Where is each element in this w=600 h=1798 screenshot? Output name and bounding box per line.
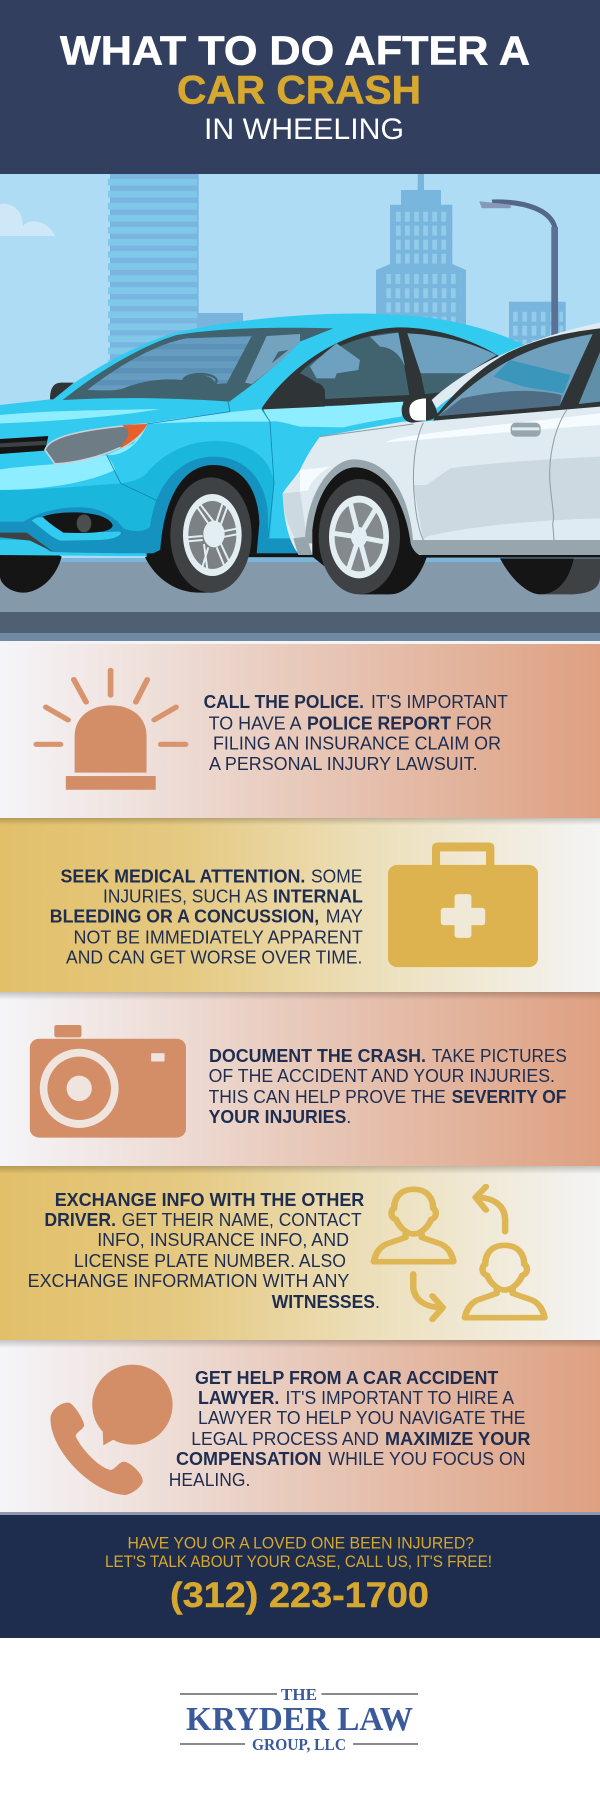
text: get help from a lawyer: WHILE YOU FOCUS ON [328, 1449, 526, 1469]
title line: what to do after a: WHAT TO DO AFTER A [60, 28, 530, 74]
text: get help from a lawyer: GET HELP FROM A CAR ACCIDENT [195, 1368, 498, 1388]
text: exchange info: EXCHANGE INFO WITH THE OTHER [55, 1190, 364, 1210]
panel: get help from a lawyer [0, 1340, 600, 1512]
logo: the kryder law group [180, 1685, 418, 1754]
icon: two people exchanging information [374, 1187, 545, 1319]
illustration: city street with two crashed cars [0, 174, 600, 644]
logo: the kryder law group: KRYDER LAW [186, 1701, 413, 1738]
icon: camera [30, 1025, 186, 1138]
city buildings [108, 174, 566, 364]
text: document the crash: . [346, 1107, 351, 1127]
text: exchange info [28, 1190, 380, 1312]
panel: call to action footer [0, 1512, 600, 1638]
call to action text: HAVE YOU OR A LOVED ONE BEEN INJURED? [128, 1534, 474, 1553]
text: get help from a lawyer: IT'S IMPORTANT TO HIRE A [286, 1388, 514, 1408]
text: document the crash: TAKE PICTURES [432, 1046, 567, 1066]
phone number: (312) 223-1700 [170, 1576, 429, 1615]
text: call the police: IT'S IMPORTANT [371, 692, 508, 712]
text: document the crash: DOCUMENT THE CRASH. [209, 1046, 426, 1066]
panel: call the police [0, 644, 600, 818]
icon: cloud [0, 204, 55, 236]
text: document the crash: SEVERITY OF [452, 1087, 566, 1107]
panel: call to action footer: LET'S TALK ABOUT YOUR CASE, CALL US, IT'S FREE! [105, 1552, 492, 1571]
text: document the crash: THIS CAN HELP PROVE THE [209, 1087, 446, 1107]
text: get help from a lawyer [169, 1368, 530, 1490]
text: get help from a lawyer: HEALING. [169, 1470, 250, 1490]
text: exchange info: . [375, 1292, 380, 1312]
text: document the crash [209, 1046, 567, 1127]
text: call the police: A PERSONAL INJURY LAWSUIT. [209, 754, 478, 774]
text: exchange info: EXCHANGE INFORMATION WITH ANY [28, 1271, 349, 1291]
text: seek medical attention: MAY [326, 906, 363, 926]
text: exchange info: DRIVER. [44, 1210, 116, 1230]
icon: first aid kit [388, 842, 538, 967]
text: exchange info: WITNESSES [272, 1292, 375, 1312]
logo: the kryder law group: GROUP, LLC [252, 1735, 346, 1754]
text: seek medical attention: INTERNAL [273, 886, 363, 906]
text: get help from a lawyer: LAWYER TO HELP YOU NAVIGATE THE [198, 1408, 526, 1428]
text: get help from a lawyer: COMPENSATION [176, 1449, 322, 1469]
text: get help from a lawyer: MAXIMIZE YOUR [385, 1429, 530, 1449]
text: exchange info: INFO, INSURANCE INFO, AND [97, 1230, 349, 1250]
text: call the police: CALL THE POLICE. [204, 692, 364, 712]
text: exchange info: GET THEIR NAME, CONTACT [122, 1210, 362, 1230]
road [0, 558, 600, 644]
text: call the police: FOR [456, 714, 492, 734]
text: call the police: FILING AN INSURANCE CLAIM OR [213, 734, 501, 754]
text: seek medical attention: AND CAN GET WORSE OVER TIME. [66, 948, 362, 968]
text: seek medical attention [50, 866, 363, 968]
text: document the crash: YOUR INJURIES [209, 1107, 346, 1127]
icon: siren [36, 670, 186, 790]
text: seek medical attention: INJURIES, SUCH AS [103, 886, 268, 906]
title line: car crash: CAR CRASH [177, 69, 421, 113]
text: call the police: POLICE REPORT [307, 714, 451, 734]
subtitle: in wheeling: IN WHEELING [204, 113, 404, 146]
text: seek medical attention: BLEEDING OR A CONCUSSION, [50, 906, 319, 926]
panel: title header [0, 0, 600, 174]
street lamp [479, 201, 558, 367]
logo: the kryder law group: THE [281, 1685, 317, 1704]
panel: seek medical attention [0, 818, 600, 992]
text: seek medical attention: SEEK MEDICAL ATTENTION. [60, 866, 305, 886]
blue car [0, 314, 600, 593]
text: document the crash: OF THE ACCIDENT AND YOUR INJURIES. [209, 1066, 555, 1086]
text: call the police: TO HAVE A [209, 714, 302, 734]
panel: exchange info [0, 1166, 600, 1340]
icon: phone with speech bubble [50, 1365, 173, 1495]
text: get help from a lawyer: LEGAL PROCESS AND [191, 1429, 379, 1449]
text: exchange info: LICENSE PLATE NUMBER. ALSO [74, 1251, 346, 1271]
text: seek medical attention: NOT BE IMMEDIATELY APPARENT [74, 928, 363, 948]
white car [283, 323, 600, 594]
text: get help from a lawyer: LAWYER. [198, 1388, 279, 1408]
text: call the police [204, 692, 508, 774]
text: seek medical attention: SOME [311, 866, 362, 886]
panel: document the crash [0, 992, 600, 1166]
